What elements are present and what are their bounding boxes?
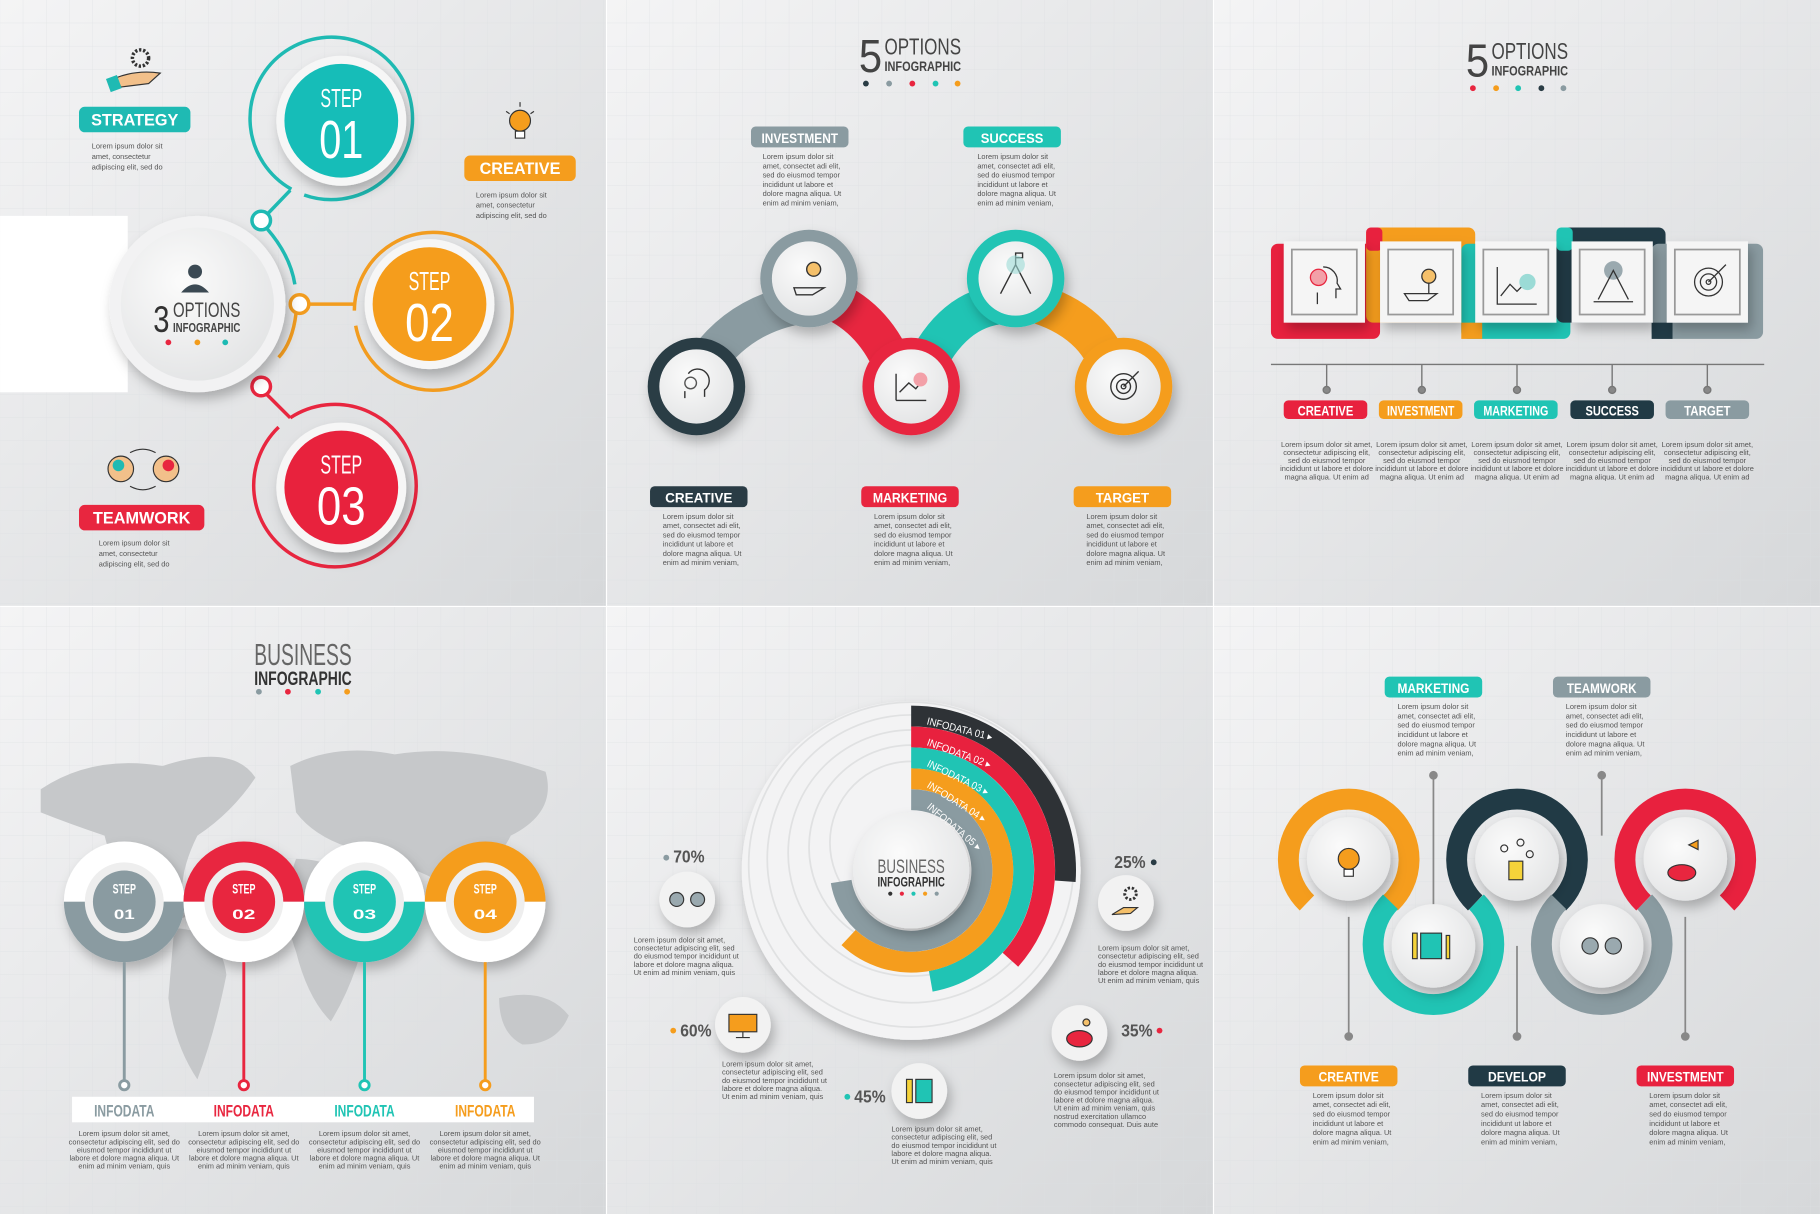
panel: circular chart: consectetur adipiscing elit, sed — [634, 944, 735, 953]
label: strategy — [79, 107, 190, 171]
panel: circular chart: nostrud exercitation ullamco — [1054, 1112, 1146, 1121]
infodata bar — [72, 1097, 534, 1122]
labels: dolore magna aliqua. Ut — [1397, 739, 1476, 748]
panel: chain rings: dolore magna aliqua. Ut — [1481, 1128, 1560, 1137]
panel: circular chart: Lorem ipsum dolor sit amet, — [1098, 944, 1189, 953]
panel: circular chart: Ut enim ad minim veniam, quis — [1098, 976, 1200, 985]
ring icons — [1338, 839, 1698, 959]
text blocks: consectetur adipiscing elit, — [1569, 448, 1656, 457]
center circle: 3 — [153, 298, 170, 340]
panel: business world map: labore et dolore magna aliqua. Ut — [189, 1154, 299, 1163]
panel: business world map: 04 — [474, 906, 497, 922]
panel: circular chart: INFODATA 05 ▸ — [924, 802, 983, 853]
text blocks: Lorem ipsum dolor sit amet, — [1662, 440, 1753, 449]
label: creative — [464, 156, 576, 220]
icon circles — [659, 872, 1154, 1119]
label: teamwork: Lorem ipsum dolor sit — [99, 538, 170, 547]
panel: business world map: STEP — [232, 881, 255, 897]
panel: chain rings: amet, consectet adi elit, — [1649, 1100, 1727, 1109]
panel: 5 options wave: sed do eiusmod tempor — [977, 171, 1055, 180]
text blocks: incididunt ut labore et dolore — [1470, 464, 1564, 473]
panel: chain rings: sed do eiusmod tempor — [1566, 721, 1644, 730]
label: creative: CREATIVE — [480, 160, 561, 178]
panel: circular chart: Lorem ipsum dolor sit amet, — [634, 935, 725, 944]
panel: 5 options wave: SUCCESS — [981, 130, 1043, 146]
panel: circular chart: consectetur adipiscing elit, sed — [891, 1133, 992, 1142]
panel: chain rings — [1288, 677, 1746, 1146]
panel: 5 options wave: enim ad minim veniam, — [663, 558, 739, 567]
percentages: 60% — [680, 1020, 712, 1040]
panel: circular chart: INFODATA 01 ▸ — [926, 716, 993, 743]
labels: incididunt ut labore et — [763, 180, 833, 189]
panel: chain rings: incididunt ut labore et — [1313, 1119, 1383, 1128]
backing tabs — [1271, 227, 1763, 339]
text blocks: magna aliqua. Ut enim ad — [1380, 472, 1464, 481]
text blocks: sed do eiusmod tempor — [1669, 456, 1747, 465]
panel: 5 options squares — [1271, 35, 1764, 481]
label: creative: adipiscing elit, sed do — [476, 211, 547, 220]
panel: business world map — [41, 639, 569, 1171]
panel: circular chart: INFODATA 04 ▸ — [925, 780, 988, 825]
text blocks: magna aliqua. Ut enim ad — [1284, 472, 1369, 481]
infodata bar: INFODATA — [94, 1103, 155, 1121]
panel: business world map: STEP — [113, 881, 136, 897]
panel: chain rings: Lorem ipsum dolor sit — [1313, 1091, 1384, 1100]
panel: 5 options wave: Lorem ipsum dolor sit — [663, 512, 734, 521]
panel: circular chart: labore et dolore magna aliqua. — [1098, 968, 1198, 977]
labels: INVESTMENT — [761, 130, 838, 146]
icon: bulb — [506, 102, 534, 138]
panel: business world map: 03 — [353, 906, 377, 922]
label: strategy: Lorem ipsum dolor sit — [92, 142, 163, 151]
panel: business world map: consectetur adipiscing elit, sed do — [188, 1137, 299, 1146]
percentages: 25% — [1114, 852, 1146, 872]
panel: 5 options wave: amet, consectet adi elit, — [1086, 521, 1164, 530]
step 02: 02 — [405, 294, 454, 353]
panel: business world map: eiusmod tempor incididunt ut — [196, 1145, 291, 1154]
panel: circular chart: INFOGRAPHIC — [878, 874, 945, 890]
panel: circular chart: labore et dolore magna aliqua. — [634, 960, 734, 969]
text blocks: magna aliqua. Ut enim ad — [1665, 472, 1750, 481]
title: INFOGRAPHIC — [884, 58, 961, 74]
panel: chain rings: sed do eiusmod tempor — [1313, 1110, 1391, 1119]
text blocks: incididunt ut labore et dolore — [1375, 464, 1468, 473]
infodata bar: INFODATA — [334, 1103, 395, 1121]
panel: chain rings: sed do eiusmod tempor — [1649, 1110, 1727, 1119]
label: strategy: STRATEGY — [91, 111, 178, 129]
panel: chain rings: INVESTMENT — [1647, 1069, 1724, 1085]
panel: business world map: Lorem ipsum dolor sit amet, — [79, 1129, 170, 1138]
label: strategy: amet, consectetur — [92, 152, 151, 161]
text blocks: Lorem ipsum dolor sit amet, — [1566, 440, 1658, 449]
panel: chain rings: dolore magna aliqua. Ut — [1313, 1128, 1391, 1137]
text blocks: magna aliqua. Ut enim ad — [1570, 472, 1654, 481]
panel: 5 options wave: dolore magna aliqua. Ut — [977, 189, 1056, 198]
infodata bar: INFODATA — [455, 1103, 516, 1121]
panel: business world map: labore et dolore magna aliqua. Ut — [310, 1154, 419, 1163]
panel: circular chart: do eiusmod tempor incididunt ut — [891, 1141, 996, 1150]
connectors — [250, 37, 519, 567]
labels: Lorem ipsum dolor sit — [1397, 702, 1468, 711]
panel: business world map: enim ad minim veniam, quis — [198, 1162, 290, 1171]
panel: 5 options wave: amet, consectet adi elit, — [663, 521, 741, 530]
text blocks: consectetur adipiscing elit, — [1474, 448, 1560, 457]
wave bands — [708, 302, 1114, 383]
panel: chain rings: amet, consectet adi elit, — [1313, 1100, 1391, 1109]
step 03: 03 — [317, 478, 366, 537]
infodata bar: INFODATA — [214, 1103, 274, 1121]
panel: business world map: STEP — [353, 881, 376, 897]
step 03: STEP — [320, 452, 362, 480]
concentric discs — [742, 701, 1081, 1040]
panel: circular chart: do eiusmod tempor incididunt ut — [1054, 1087, 1159, 1096]
panel: chain rings: incididunt ut labore et — [1649, 1119, 1720, 1128]
timeline — [1271, 364, 1764, 393]
panel: circular chart: Ut enim ad minim veniam, quis — [634, 968, 735, 977]
panel: circular chart: labore et dolore magna aliqua. — [1054, 1096, 1154, 1105]
panel: business world map: consectetur adipiscing elit, sed do — [309, 1137, 420, 1146]
text blocks: Lorem ipsum dolor sit amet, — [1281, 440, 1372, 449]
panel: 5 options wave: enim ad minim veniam, — [1086, 558, 1163, 567]
panel: 5 options wave — [648, 30, 1172, 567]
title: 5 — [1466, 35, 1489, 87]
panel: circular chart: Lorem ipsum dolor sit amet, — [722, 1060, 813, 1069]
panel: chain rings: Lorem ipsum dolor sit — [1481, 1091, 1552, 1100]
panel: 5 options wave: CREATIVE — [665, 490, 732, 506]
panel: 5 options wave: Lorem ipsum dolor sit — [1086, 512, 1157, 521]
panel: business world map: 01 — [114, 906, 135, 922]
panel: business world map: enim ad minim veniam, quis — [319, 1162, 411, 1171]
panel: 5 options wave: sed do eiusmod tempor — [874, 530, 952, 539]
title: INFOGRAPHIC — [1491, 62, 1568, 78]
panel: business world map: Lorem ipsum dolor sit amet, — [440, 1129, 531, 1138]
panel: 5 options wave: sed do eiusmod tempor — [1086, 530, 1164, 539]
panel: business world map: 02 — [232, 906, 256, 922]
panel: circular chart: labore et dolore magna aliqua. — [891, 1149, 991, 1158]
label: teamwork: adipiscing elit, sed do — [99, 559, 170, 568]
panel: chain rings: incididunt ut labore et — [1566, 730, 1636, 739]
icon: teamwork heads — [108, 449, 179, 490]
text blocks: incididunt ut labore et dolore — [1661, 464, 1754, 473]
text blocks: magna aliqua. Ut enim ad — [1475, 472, 1559, 481]
panel: 5 options wave: incididunt ut labore et — [1086, 540, 1157, 549]
text blocks: consectetur adipiscing elit, — [1664, 448, 1751, 457]
text blocks: consectetur adipiscing elit, — [1283, 448, 1370, 457]
panel: circular chart: do eiusmod tempor incididunt ut — [722, 1076, 827, 1085]
labels — [1385, 677, 1482, 758]
panel: 5 options squares: SUCCESS — [1585, 402, 1639, 418]
panel: circular chart: consectetur adipiscing elit, sed — [722, 1068, 823, 1077]
labels: sed do eiusmod tempor — [1397, 721, 1475, 730]
labels: enim ad minim veniam, — [1397, 749, 1474, 758]
panel: 5 options wave: amet, consectet adi elit, — [874, 521, 952, 530]
text blocks: sed do eiusmod tempor — [1573, 456, 1651, 465]
panel: 5 options squares: TARGET — [1684, 402, 1731, 418]
panel: circular chart: Ut enim ad minim veniam, quis — [722, 1092, 824, 1101]
panel: 5 options wave: Lorem ipsum dolor sit — [977, 152, 1048, 161]
label: creative: Lorem ipsum dolor sit — [476, 190, 547, 199]
title: 5 — [859, 30, 882, 82]
panel: 5 options wave: enim ad minim veniam, — [874, 558, 950, 567]
label: teamwork: amet, consectetur — [99, 549, 158, 558]
percentages: 35% — [1121, 1020, 1153, 1040]
panel: 5 options squares: MARKETING — [1483, 402, 1548, 418]
panel: business world map: labore et dolore magna aliqua. Ut — [70, 1154, 179, 1163]
percentages — [663, 846, 1162, 1107]
labels: amet, consectet adi elit, — [1397, 711, 1475, 720]
panel: circular chart: labore et dolore magna aliqua. — [722, 1084, 822, 1093]
panel: chain rings: amet, consectet adi elit, — [1481, 1100, 1559, 1109]
panel: 5 options wave: sed do eiusmod tempor — [663, 530, 741, 539]
panel: circular chart: Lorem ipsum dolor sit amet, — [1054, 1071, 1145, 1080]
panel: 5 options wave: incididunt ut labore et — [663, 540, 733, 549]
labels: sed do eiusmod tempor — [763, 171, 841, 180]
panel: circular chart: INFODATA 02 ▸ — [925, 738, 992, 771]
panel: business world map: Lorem ipsum dolor sit amet, — [198, 1129, 290, 1138]
step 01: 01 — [319, 111, 363, 170]
title: OPTIONS — [1491, 38, 1568, 64]
panel: business world map: Lorem ipsum dolor sit amet, — [319, 1129, 410, 1138]
labels: enim ad minim veniam, — [763, 198, 839, 207]
panel: chain rings: TEAMWORK — [1567, 680, 1637, 696]
panel: chain rings: sed do eiusmod tempor — [1481, 1110, 1559, 1119]
step circles — [64, 841, 546, 962]
center circle: OPTIONS — [173, 299, 240, 322]
label: strategy: adipiscing elit, sed do — [92, 162, 163, 171]
panel: chain rings: dolore magna aliqua. Ut — [1566, 739, 1644, 748]
panel: 5 options wave: Lorem ipsum dolor sit — [874, 512, 945, 521]
panel: business world map: eiusmod tempor incididunt ut — [438, 1145, 533, 1154]
step 03 — [276, 422, 406, 552]
panel: 5 options wave: TARGET — [1096, 490, 1150, 506]
panel: 3 options steps — [0, 37, 576, 568]
title: BUSINESS — [254, 639, 352, 672]
panel: chain rings: dolore magna aliqua. Ut — [1649, 1128, 1728, 1137]
panel: business world map: STEP — [474, 881, 497, 897]
center circle: INFOGRAPHIC — [173, 320, 240, 335]
panel: business world map: enim ad minim veniam, quis — [78, 1162, 170, 1171]
labels: MARKETING — [1397, 680, 1469, 696]
text blocks: sed do eiusmod tempor — [1288, 456, 1366, 465]
panel: 5 options wave: incididunt ut labore et — [874, 540, 944, 549]
text blocks: Lorem ipsum dolor sit amet, — [1471, 440, 1563, 449]
panel: chain rings: Lorem ipsum dolor sit — [1566, 702, 1637, 711]
panel: circular chart: consectetur adipiscing elit, sed — [1054, 1079, 1155, 1088]
step 01: STEP — [320, 85, 362, 113]
panel: chain rings: enim ad minim veniam, — [1313, 1137, 1389, 1146]
label: teamwork: TEAMWORK — [93, 509, 191, 527]
panel: chain rings: enim ad minim veniam, — [1649, 1137, 1725, 1146]
panel: chain rings: enim ad minim veniam, — [1481, 1137, 1557, 1146]
text blocks: Lorem ipsum dolor sit amet, — [1376, 440, 1468, 449]
panel: business world map: consectetur adipiscing elit, sed do — [69, 1137, 180, 1146]
label: teamwork — [79, 505, 204, 568]
text blocks: incididunt ut labore et dolore — [1280, 464, 1373, 473]
labels: Lorem ipsum dolor sit — [763, 152, 833, 161]
labels: CREATIVE — [1298, 402, 1353, 418]
panel: chain rings: Lorem ipsum dolor sit — [1649, 1091, 1720, 1100]
panel: business world map: eiusmod tempor incididunt ut — [317, 1145, 412, 1154]
panel: circular chart: do eiusmod tempor incididunt ut — [1098, 960, 1203, 969]
labels: amet, consectet adi elit, — [763, 161, 840, 170]
panel: chain rings: enim ad minim veniam, — [1566, 749, 1642, 758]
text blocks: sed do eiusmod tempor — [1478, 456, 1556, 465]
percentages: 70% — [673, 846, 705, 866]
icon: gear hand — [106, 50, 160, 92]
text blocks — [1280, 440, 1754, 481]
panel: circular chart: do eiusmod tempor incididunt ut — [634, 952, 739, 961]
icons — [685, 253, 1139, 400]
square icons — [1310, 261, 1726, 304]
step 01 — [276, 56, 406, 186]
title — [1466, 35, 1568, 91]
panel: circular chart: BUSINESS — [878, 856, 945, 878]
rings — [1288, 799, 1746, 1005]
panel: 5 options squares: INVESTMENT — [1387, 402, 1455, 418]
panel: chain rings: amet, consectet adi elit, — [1566, 711, 1644, 720]
panel: circular chart: INFODATA 03 ▸ — [925, 759, 990, 798]
world map — [41, 751, 569, 1079]
labels: incididunt ut labore et — [1397, 730, 1468, 739]
pins — [120, 962, 490, 1090]
panel: 5 options wave: dolore magna aliqua. Ut — [663, 549, 741, 558]
center circle — [109, 216, 286, 392]
text blocks: incididunt ut labore et dolore — [1566, 464, 1659, 473]
step 02 — [365, 239, 495, 369]
title — [254, 639, 352, 695]
label: creative: amet, consectetur — [476, 201, 535, 210]
panel: chain rings: incididunt ut labore et — [1481, 1119, 1551, 1128]
panel: 5 options wave: MARKETING — [873, 490, 947, 506]
panel: circular chart: consectetur adipiscing elit, sed — [1098, 952, 1199, 961]
panel: 5 options wave: enim ad minim veniam, — [977, 198, 1053, 207]
step 02: STEP — [409, 268, 450, 296]
panel: chain rings: CREATIVE — [1319, 1069, 1379, 1085]
pins — [1345, 772, 1689, 1040]
panel: circular chart: Ut enim ad minim veniam, quis — [891, 1157, 993, 1166]
title: OPTIONS — [884, 34, 961, 60]
arcs — [841, 716, 1066, 981]
panel: circular chart: Ut enim ad minim veniam, quis — [1054, 1104, 1155, 1113]
panel: circular chart — [634, 701, 1203, 1166]
panel: business world map: labore et dolore magna aliqua. Ut — [430, 1154, 540, 1163]
panel: 5 options wave: dolore magna aliqua. Ut — [1086, 549, 1165, 558]
panel: 5 options wave: amet, consectet adi elit, — [977, 161, 1055, 170]
text blocks: sed do eiusmod tempor — [1383, 456, 1461, 465]
labels — [751, 127, 848, 207]
panel: business world map: eiusmod tempor incididunt ut — [77, 1145, 172, 1154]
panel: 5 options wave: incididunt ut labore et — [977, 180, 1048, 189]
panel: business world map: consectetur adipiscing elit, sed do — [430, 1137, 541, 1146]
title — [859, 30, 961, 86]
panel: circular chart: commodo consequat. Duis aute — [1054, 1120, 1158, 1129]
percentages: 45% — [854, 1087, 886, 1107]
panel: chain rings: DEVELOP — [1488, 1069, 1546, 1085]
labels: dolore magna aliqua. Ut — [763, 189, 841, 198]
panel: 5 options wave: dolore magna aliqua. Ut — [874, 549, 953, 558]
center — [853, 812, 969, 928]
title: INFOGRAPHIC — [254, 668, 352, 690]
panel: business world map: enim ad minim veniam, quis — [439, 1162, 531, 1171]
text blocks: consectetur adipiscing elit, — [1378, 448, 1465, 457]
panel: circular chart: Lorem ipsum dolor sit amet, — [891, 1125, 983, 1134]
